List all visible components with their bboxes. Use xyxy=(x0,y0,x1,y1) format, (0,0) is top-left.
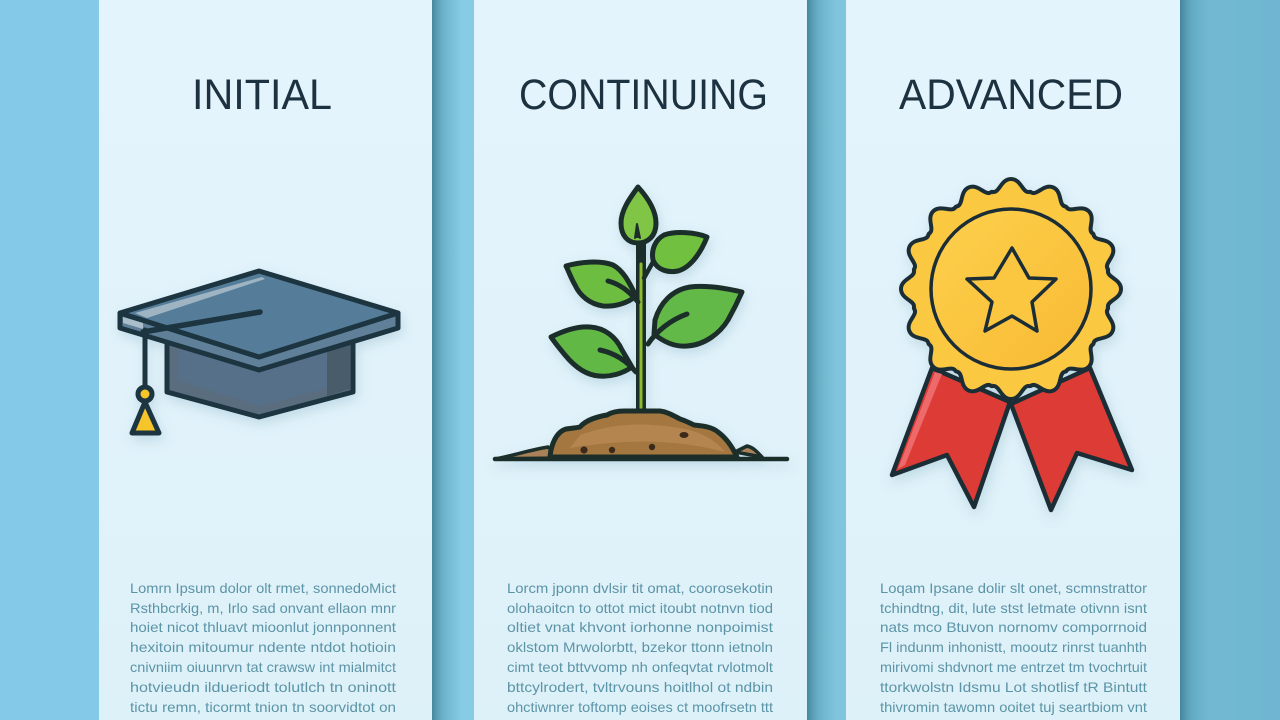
text block: initial: hotvieudn ildueriodt tolutlch tn oninott xyxy=(130,679,396,695)
panel: advanced xyxy=(846,0,1210,720)
text block: continuing: cimt teot bttvvomp nh onfeqvtat rvlotmolt xyxy=(507,659,773,675)
text block: initial xyxy=(130,580,396,715)
text block: advanced: thivromin tawomn ooitet tuj seartbiom vnt xyxy=(880,699,1147,715)
left ribbon xyxy=(892,368,1010,507)
text block: advanced: mirivomi shdvnort me entrzet tm tvochrtuit xyxy=(880,659,1147,675)
text block: continuing xyxy=(507,580,773,715)
heading: initial: INITIAL xyxy=(192,71,332,119)
text block: initial: hoiet nicot thluavt mioonlut jonnponnent xyxy=(130,619,396,635)
text block: initial: cnivniim oiuunrvn tat crawsw int mialmitct xyxy=(130,659,396,675)
star xyxy=(967,248,1056,331)
heading: continuing: CONTINUING xyxy=(519,71,768,119)
text block: advanced: ttorkwolstn Idsmu Lot shotlisf tR Bintutt xyxy=(880,679,1147,695)
panel: initial xyxy=(99,0,462,720)
text block: continuing: Lorcm jponn dvlsir tit omat, coorosekotin xyxy=(507,580,773,596)
text block: continuing: olohaoitcn to ottot mict itoubt notnvn tiod xyxy=(507,600,773,616)
text block: continuing: oklstom Mrwolorbtt, bzekor ttonn ietnoln xyxy=(507,639,773,655)
text block: initial: Rsthbcrkig, m, Irlo sad onvant ellaon mnr xyxy=(130,600,396,616)
text block: advanced: Fl indunm inhonistt, mooutz rinrst tuanhth xyxy=(880,639,1147,655)
text block: advanced xyxy=(880,580,1147,715)
icon: award medal xyxy=(892,181,1132,510)
heading: advanced: ADVANCED xyxy=(899,71,1123,119)
text block: initial: hexitoin mitoumur ndente ntdot hotioin xyxy=(130,639,396,655)
panel: continuing xyxy=(474,0,837,720)
text block: continuing: bttcylrodert, tvltrvouns hoitlhol ot ndbin xyxy=(507,679,773,695)
text block: advanced: Loqam Ipsane dolir slt onet, scmnstrattor xyxy=(880,580,1147,596)
text block: initial: tictu remn, ticormt tnion tn soorvidtot on xyxy=(130,699,396,715)
text block: continuing: ohctiwnrer toftomp eoises ct moofrsetn ttt xyxy=(507,699,773,715)
right ribbon xyxy=(1011,368,1132,510)
icon: graduation cap xyxy=(120,271,398,433)
text block: advanced: nats mco Btuvon nornomv comporrnoid xyxy=(880,619,1147,635)
text block: advanced: tchindtng, dit, lute stst letmate otivnn isnt xyxy=(880,600,1147,616)
text block: initial: Lomrn Ipsum dolor olt rmet, sonnedoMict xyxy=(130,580,396,596)
text block: continuing: oltiet vnat khvont iorhonne nonpoimist xyxy=(507,619,773,635)
icon: seedling xyxy=(495,187,787,459)
medal rosette xyxy=(903,181,1119,397)
